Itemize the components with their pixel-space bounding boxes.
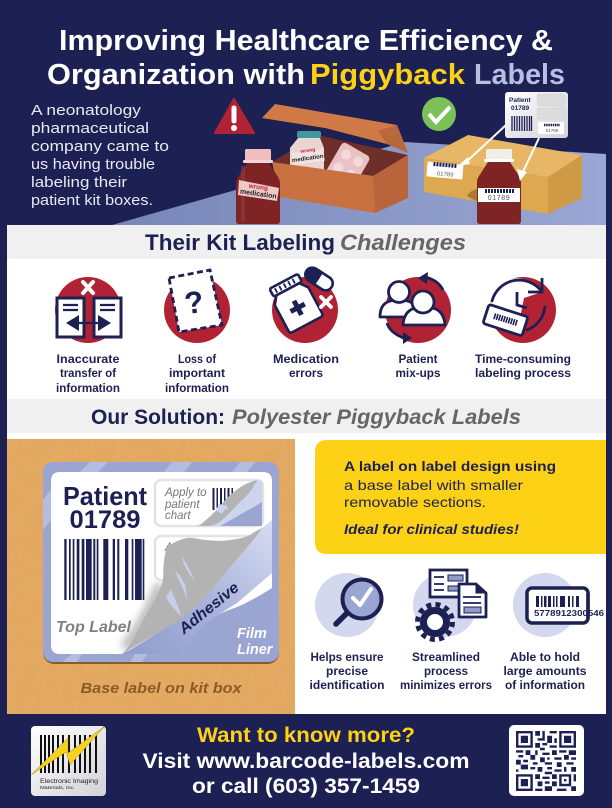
top label: 01789 [70,506,140,534]
icon: wrong medication bottle [236,149,280,224]
callout: label on label design: Ideal for clinical studies! [344,521,519,537]
title [47,25,565,91]
intro text: labeling their [31,174,127,191]
piggyback label callout: 01789 [511,105,529,112]
base label caption: Base label on kit box [80,681,243,697]
benefit: precise identification: identification [310,680,384,692]
icon: medication jar inside box [290,131,325,178]
challenge: loss of information: important [169,368,225,380]
benefit: streamlined process: process [424,666,468,678]
illustration: wrong medication box [262,104,408,213]
top label: Top Label [56,619,132,636]
challenge: time-consuming labeling: Time-consuming [475,354,571,366]
challenge: time-consuming labeling: labeling process [475,368,571,380]
icon: check mark [422,97,456,131]
top label: Patient [63,481,147,511]
intro text: patient kit boxes. [31,192,153,209]
challenge: inaccurate transfer: transfer of [60,368,116,380]
removable sections: Apply to [164,487,207,499]
challenge: loss of information [164,270,230,395]
title: Piggyback [310,59,466,91]
footer company logo: Electronic Imaging [40,779,98,785]
piggyback label diagram [43,462,279,664]
film liner [43,462,279,664]
callout: label on label design: a base label with smaller [344,477,523,493]
callout: label on label design [315,440,606,554]
title: Labels [474,59,565,91]
intro text: us having trouble [31,156,155,173]
heading band: challenges: Their Kit Labeling [145,230,335,255]
challenge: loss of information: information [165,383,229,395]
intro text: A neonatology [31,102,142,119]
challenge: inaccurate transfer: Inaccurate [56,354,120,366]
footer call to action [142,724,470,798]
benefit: precise identification: Helps ensure [310,652,384,664]
intro text [31,102,169,209]
challenge: medication errors [267,265,339,380]
heading band: challenges [7,225,606,259]
icon: blister pack [323,141,371,192]
challenge: time-consuming labeling [475,277,571,380]
challenge: loss of information: ? [182,284,206,321]
footer company logo: Materials, Inc. [40,785,75,790]
adhesive underside and curl [122,520,272,654]
surface under boxes [0,142,606,225]
footer call to action: Visit www.barcode-labels.com [142,750,470,773]
heading band: solution: Polyester Piggyback Labels [232,406,521,429]
piggyback label callout: 01789 [546,128,559,133]
challenge: medication errors: errors [289,368,323,380]
adhesive label text: Adhesive [175,579,243,638]
illustration: correct kit box [424,135,582,214]
removable sections: Apply to [164,542,207,554]
title: Organization with [47,59,305,91]
barcode [64,539,144,600]
main white panel [7,225,606,714]
challenge: medication errors: Medication [273,354,339,366]
icon: correct medication bottle [477,149,521,224]
challenge: patient mix-ups [380,272,451,380]
piggyback label callout: Patient [509,97,532,104]
icon: medication jar inside box: wrong [299,147,316,155]
benefit: precise identification: precise [326,666,368,678]
small curl on first section [198,480,262,526]
icon: medication jar inside box: medication [292,154,324,164]
challenge: patient mix-ups: Patient [398,354,438,366]
title: Improving Healthcare Efficiency & [59,25,553,57]
footer call to action: or call (603) 357-1459 [192,775,420,798]
removable sections: chart [165,510,191,522]
challenge: inaccurate transfer: information [56,383,120,395]
benefit: large amounts of information: Able to hold [510,652,580,664]
film liner label text: Liner [237,642,274,658]
film liner label text [237,626,274,658]
base label on box: 01789 [437,171,454,179]
piggyback label callout [505,92,568,138]
icon: correct medication bottle: 01789 [488,195,510,202]
intro text: company came to [31,138,169,155]
heading band: challenges: Challenges [340,230,466,255]
benefit: large amounts of information: 5778912300546 [534,608,604,618]
benefit: large amounts of information: of information [505,680,585,692]
benefit: precise identification [310,573,384,692]
footer company logo [31,726,106,796]
challenge: inaccurate transfer [55,277,121,395]
arrows from label to box and bottle [458,125,539,181]
footer call to action: Want to know more? [197,724,415,747]
challenge: patient mix-ups: mix-ups [396,368,440,380]
intro text: pharmaceutical [31,120,149,137]
panel: kit box surface [7,439,295,714]
QR code [509,725,584,796]
heading band: solution [7,399,606,433]
icon: wrong medication bottle: medication [239,188,277,201]
callout: label on label design: removable sections. [344,494,486,510]
benefit: large amounts of information: large amounts [504,666,586,678]
heading band: solution: Our Solution: [91,406,225,429]
removable sections [155,480,263,580]
benefit: streamlined process [400,570,492,692]
top label [51,472,272,654]
challenge: loss of information: Loss of [178,354,216,366]
benefit: streamlined process: Streamlined [412,652,480,664]
icon: warning triangle [215,99,254,133]
removable sections: patient [164,499,200,511]
base label on box [426,161,464,180]
benefit: streamlined process: minimizes errors [400,680,492,692]
benefit: large amounts of information [504,573,604,692]
icon: wrong medication bottle: wrong [247,183,268,192]
film liner label text: Film [237,626,267,642]
callout: label on label design: A label on label design using [344,458,556,474]
